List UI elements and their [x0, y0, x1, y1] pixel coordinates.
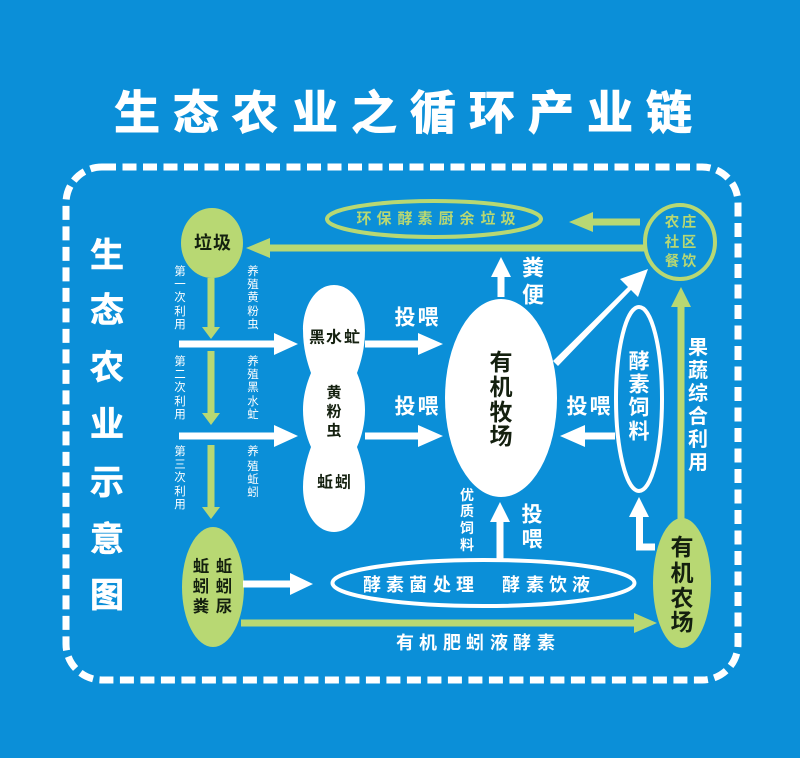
node: earthworm waste: 蚯蚓尿	[216, 557, 233, 616]
node: community dining: 农庄社区餐饮	[665, 213, 697, 270]
arrow: enzyme up to ranch	[490, 502, 510, 560]
node: enzyme feed	[616, 307, 662, 491]
arrow: waste to enzyme treatment	[243, 573, 313, 595]
node: insects cloud: 黄粉虫	[326, 384, 342, 440]
arrow: community to kitchen waste	[569, 212, 640, 232]
arrow: garbage down 2	[202, 351, 220, 425]
arrow: feed 3	[560, 425, 615, 447]
label: feed 3: 投喂	[566, 396, 610, 418]
arrow: white to insects 2	[179, 425, 298, 447]
node: enzyme feed: 酵素饲料	[628, 350, 650, 444]
label: manure: 粪便	[522, 256, 544, 308]
arrow: fruit and vegetable up	[671, 287, 691, 520]
arrow: garbage down 1	[202, 278, 220, 339]
node: kitchen waste	[327, 201, 541, 237]
node: community dining	[645, 205, 715, 279]
side heading: 生态农业示意图	[90, 237, 124, 615]
node: earthworm waste: 蚯蚓粪	[193, 557, 210, 616]
label: feed 2: 投喂	[394, 396, 438, 418]
label: breed black soldier fly: 养殖黑水虻	[247, 354, 259, 421]
arrow: feed 1	[365, 333, 443, 355]
label: first use: 第一次利用	[174, 264, 186, 331]
arrow: fertilizer to farm	[241, 613, 657, 633]
node: organic ranch	[445, 299, 557, 497]
node: enzyme treatment: 酵素菌处理	[363, 575, 474, 595]
label: second use: 第二次利用	[174, 354, 186, 421]
panel: dashed frame	[66, 167, 738, 680]
label: feed 4: 投喂	[522, 504, 542, 552]
arrow: ranch to community	[553, 269, 648, 366]
node: kitchen waste: 环保酵素厨余垃圾	[356, 210, 516, 228]
node: enzyme treatment	[332, 560, 634, 606]
arrow: feed 2	[365, 425, 443, 447]
arrow: white to insects 1	[179, 333, 298, 355]
node: organic farm	[653, 518, 711, 648]
arrow: garbage down 3	[202, 445, 220, 519]
label: quality feed: 优质饲料	[460, 487, 474, 553]
node: insects cloud	[303, 285, 365, 532]
label: feed 1: 投喂	[394, 306, 438, 330]
arrow: manure up	[491, 257, 511, 297]
node: garbage	[181, 208, 243, 278]
label: breed earthworm: 养殖蚯蚓	[247, 444, 259, 499]
node: enzyme treatment: 酵素饮液	[502, 575, 590, 595]
label: fruit and vegetable use: 果蔬综合利用	[688, 337, 708, 474]
label: breed mealworm: 养殖黄粉虫	[247, 264, 259, 331]
node: earthworm waste	[182, 527, 244, 647]
node: insects cloud: 蚯蚓	[317, 474, 351, 492]
arrow: farm to enzyme feed	[629, 497, 655, 550]
node: organic ranch: 有机牧场	[490, 349, 512, 449]
node: insects cloud: 黑水虻	[309, 328, 360, 346]
arrow: community to garbage	[246, 238, 645, 258]
label: organic fertilizer: 有机肥蚓液酵素	[396, 633, 555, 653]
node: garbage: 垃圾	[194, 232, 231, 253]
title: 生态农业之循环产业链	[114, 87, 692, 139]
node: organic farm: 有机农场	[670, 534, 694, 635]
label: third use: 第三次利用	[174, 444, 186, 511]
